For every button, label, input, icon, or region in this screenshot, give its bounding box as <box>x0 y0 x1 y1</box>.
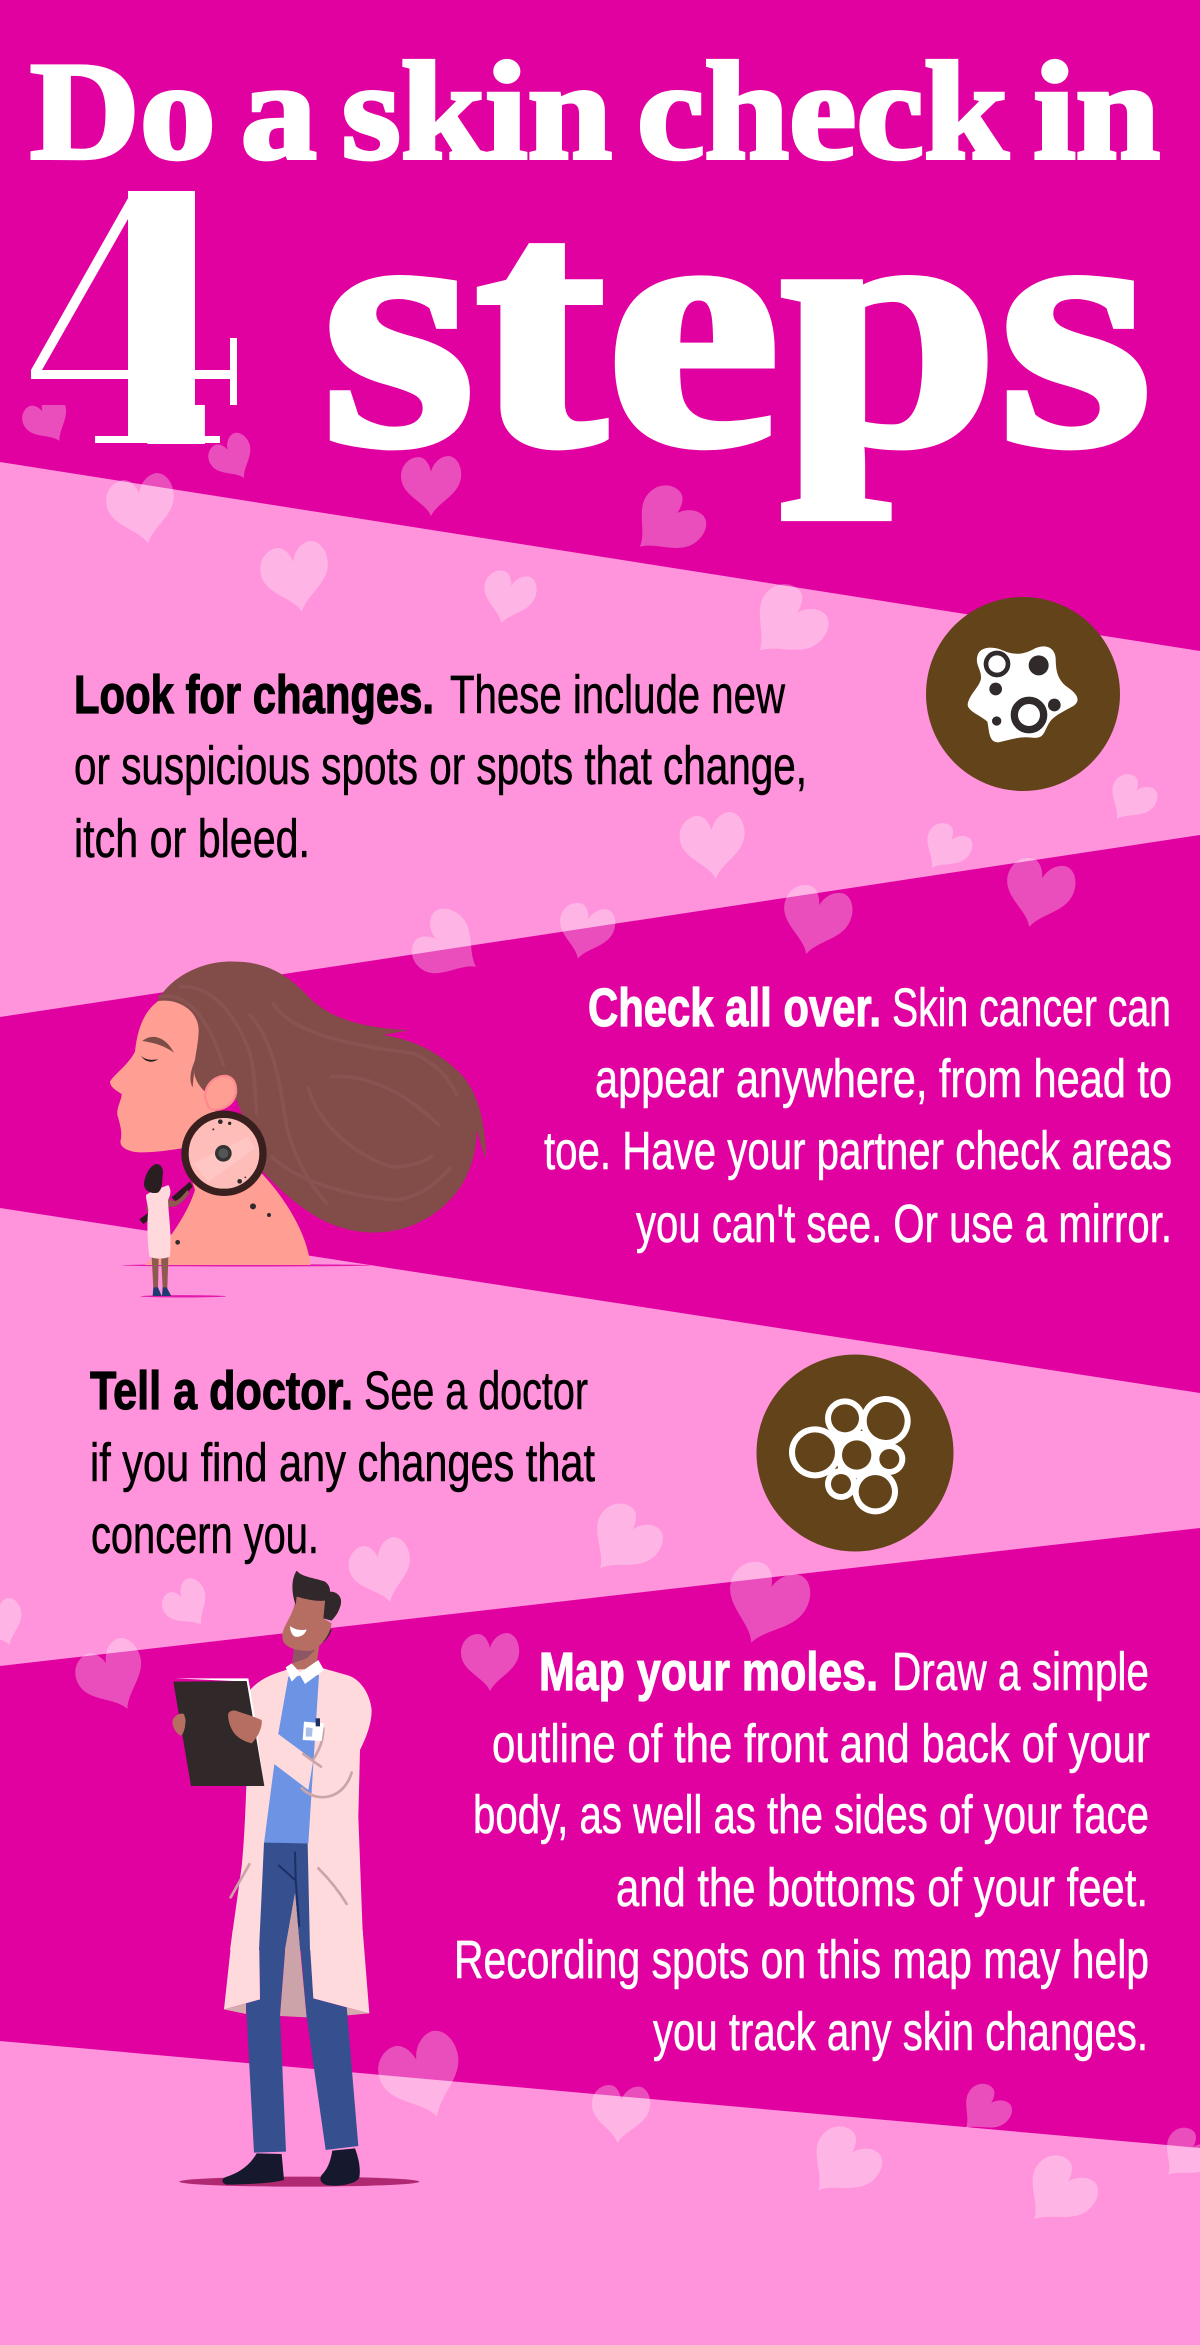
hair wisp at temple <box>190 1058 196 1087</box>
doctor lower body <box>179 1930 419 2187</box>
band: bottom light pink <box>0 2041 1200 2345</box>
smile <box>290 1626 307 1637</box>
doctor upper body <box>173 1571 372 1950</box>
text block: map your moles <box>454 1642 1150 2062</box>
inner gap <box>285 1893 300 1950</box>
title line 1: Do a skin check in <box>30 34 1160 189</box>
left leg <box>246 1930 287 2153</box>
text block: tell a doctor: concern you. <box>91 1505 319 1565</box>
band: step 1 light pink <box>0 462 1200 1017</box>
title numeral 4: 4 <box>29 121 239 522</box>
title word steps: steps <box>322 134 1152 519</box>
face and shoulders <box>110 1001 311 1265</box>
hair strands <box>160 987 457 1203</box>
coat <box>230 1668 372 1950</box>
ground shadows <box>122 1264 372 1297</box>
coat sleeve <box>252 1723 313 1790</box>
text block: tell a doctor: if you find any changes that <box>90 1433 595 1493</box>
gap between legs <box>280 1930 307 2017</box>
text block: tell a doctor: See a doctor <box>364 1361 588 1421</box>
text block: look for changes <box>74 665 807 869</box>
text block: tell a doctor: Tell a doctor. <box>90 1361 353 1421</box>
clipboard <box>173 1678 264 1786</box>
neck <box>292 1640 320 1673</box>
sweater <box>264 1675 319 1843</box>
icon: cluster of rings <box>756 1354 954 1552</box>
text block: tell a doctor <box>90 1361 595 1565</box>
closed eye <box>141 1056 158 1062</box>
text block: look for changes: These include new <box>450 665 786 725</box>
id badge <box>303 1718 324 1741</box>
decorative hearts <box>0 390 1200 2242</box>
band: step 3 light pink <box>0 1208 1200 1666</box>
text block: map your moles: Map your moles. <box>539 1642 878 1702</box>
trouser creases <box>278 1852 299 1927</box>
right leg <box>299 1930 358 2150</box>
small woman figure <box>144 1164 189 1296</box>
illustration: doctor with clipboard <box>173 1571 419 2187</box>
right shoe <box>320 2148 360 2186</box>
ear <box>205 1076 236 1110</box>
eyebrow <box>142 1037 174 1053</box>
collar <box>286 1660 324 1684</box>
hair <box>157 962 486 1233</box>
coat fold lines <box>231 1728 352 1904</box>
hair <box>292 1571 341 1621</box>
text block: check all over <box>544 978 1172 1254</box>
text block: look for changes: or suspicious spots or spots that change, <box>74 736 807 796</box>
icon: skin spot blob <box>926 597 1120 791</box>
title <box>10 34 1160 522</box>
text block: look for changes: Look for changes. <box>74 665 434 725</box>
left hand <box>173 1714 186 1736</box>
illustration: woman profile with magnifier <box>110 962 486 1297</box>
face <box>282 1595 332 1651</box>
moles on shoulder <box>175 1203 271 1245</box>
coat tails <box>224 1930 260 2009</box>
right hand <box>228 1710 262 1743</box>
back of hair <box>318 1627 332 1645</box>
trousers top <box>259 1843 310 1950</box>
text block: look for changes: itch or bleed. <box>74 809 310 869</box>
coat hem shadows <box>224 2003 246 2014</box>
magnifying glass <box>139 1114 263 1224</box>
left shoe <box>222 2153 284 2185</box>
floor shadow <box>179 2177 419 2187</box>
text block: check all over: Check all over. <box>588 978 881 1038</box>
